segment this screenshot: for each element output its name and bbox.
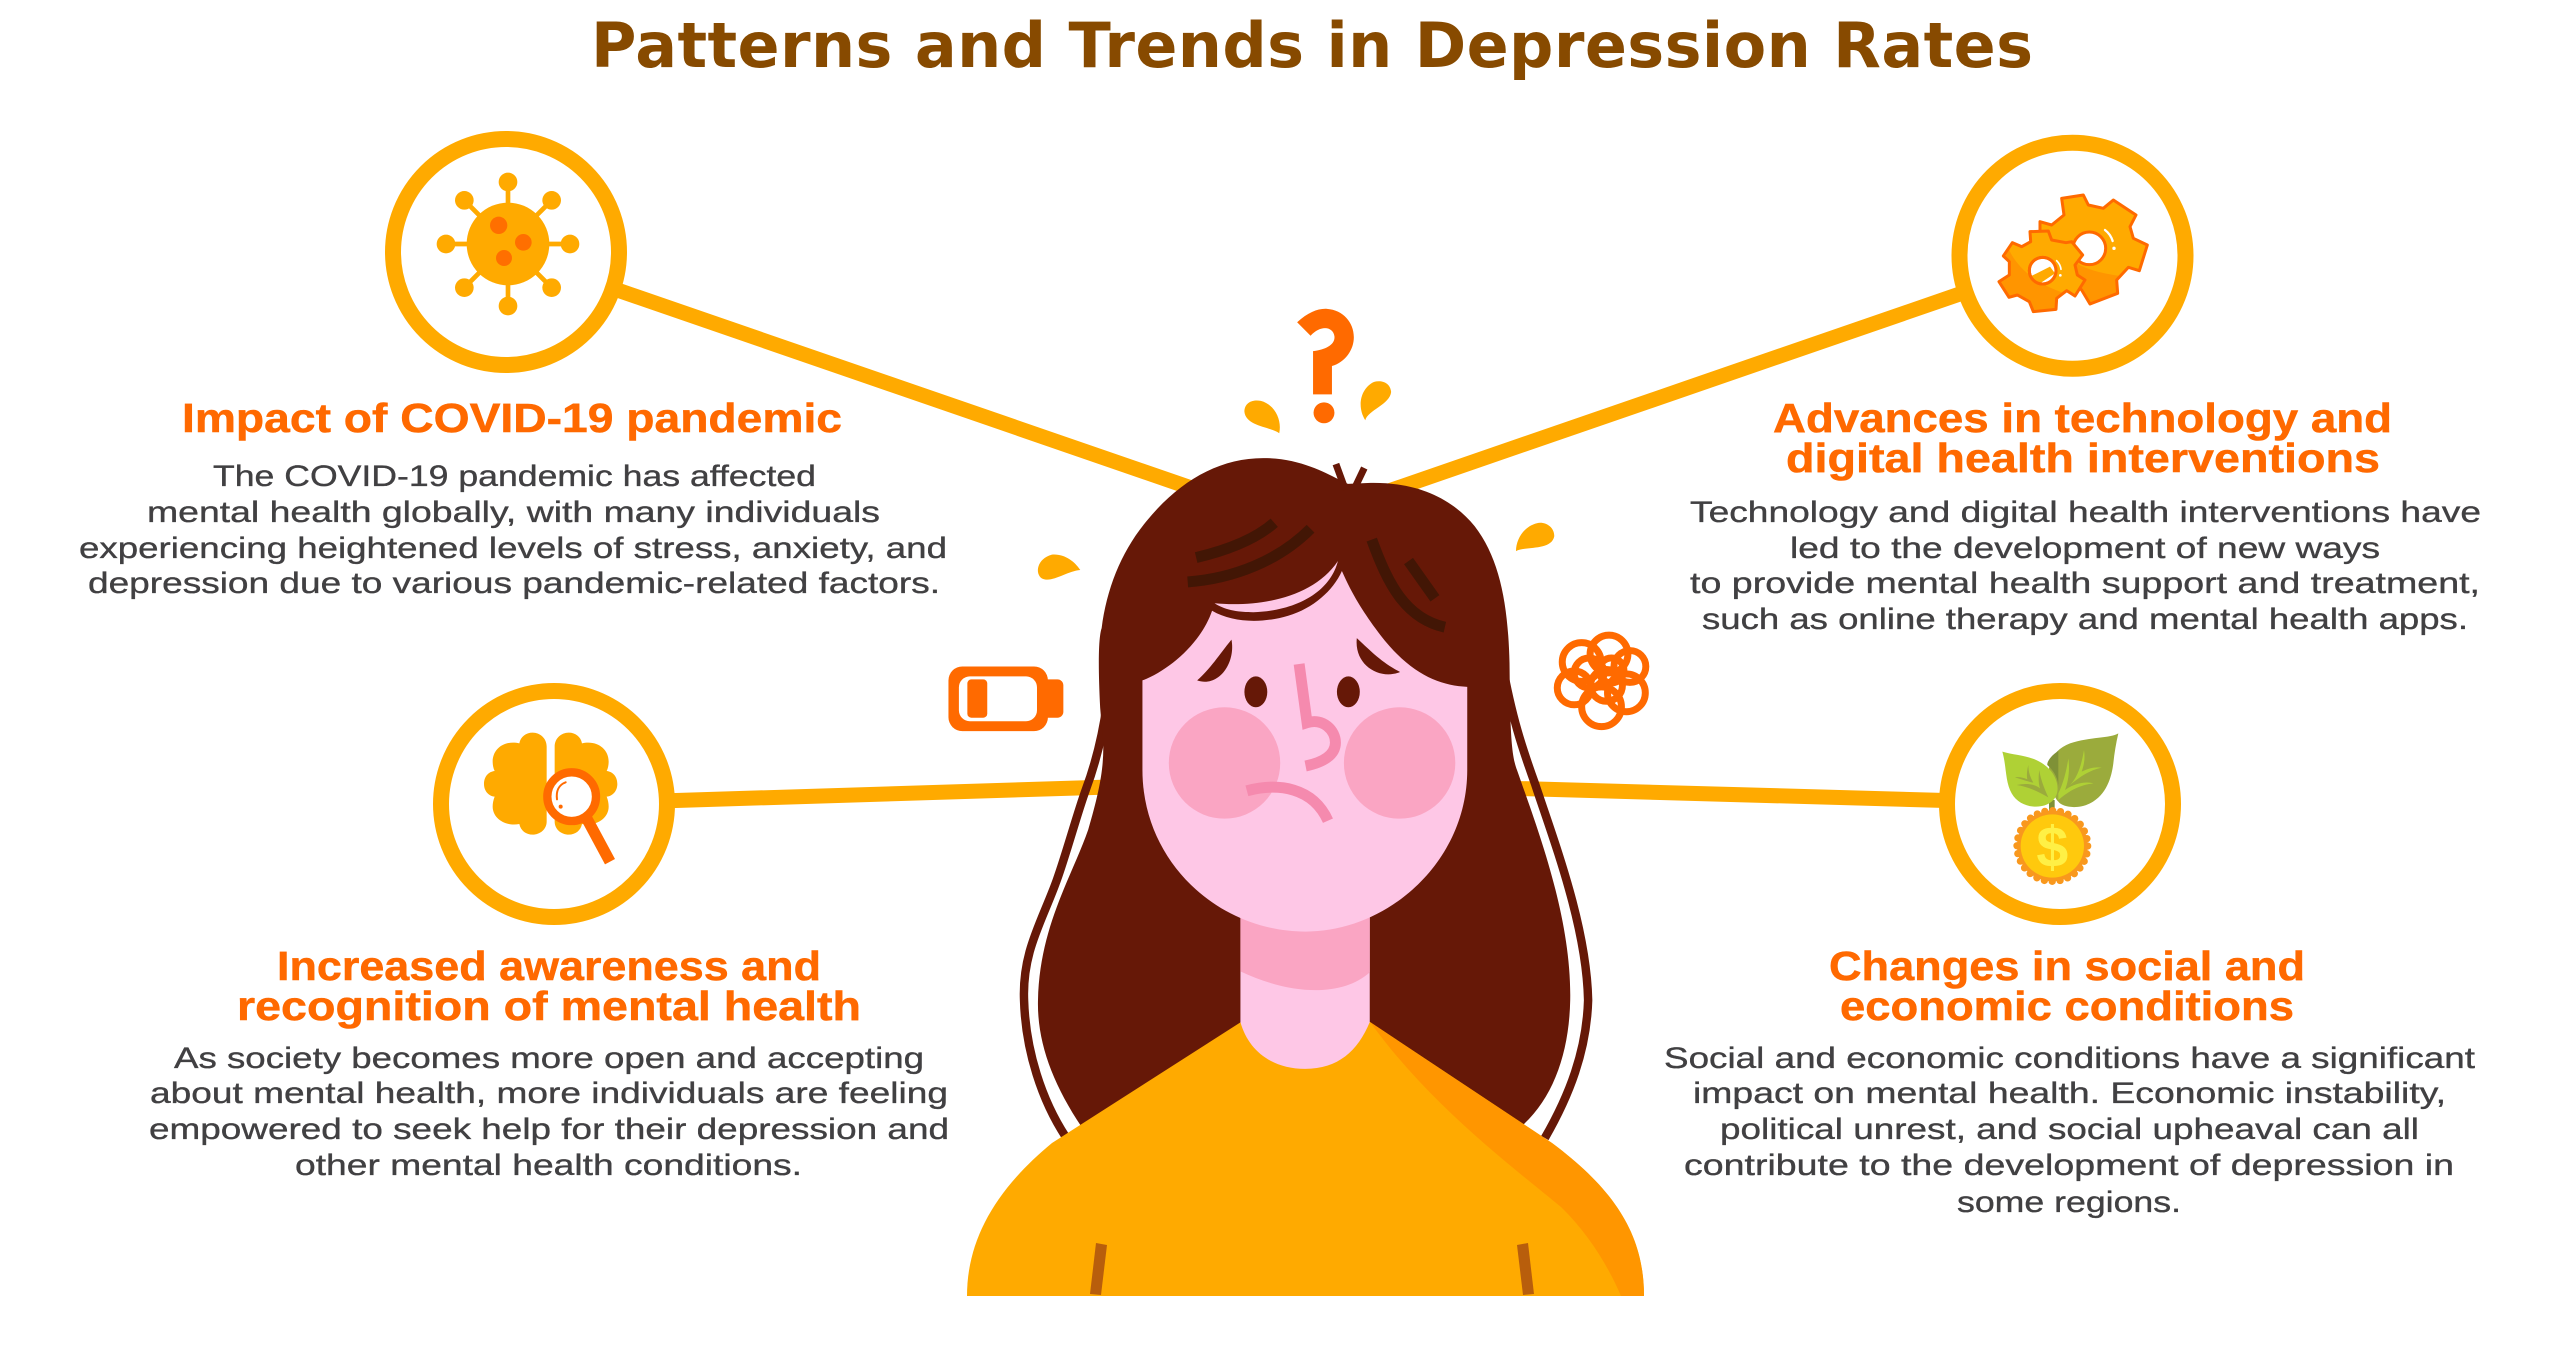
icon: plant and coin: $ [2036, 816, 2068, 880]
heading: Advances in technology and [1773, 395, 2392, 441]
ring [441, 691, 667, 917]
body: Technology and digital health interventions have [1690, 496, 2481, 529]
panel: covid icon [393, 139, 619, 365]
icon: brain with magnifier [484, 733, 617, 862]
hair [1038, 458, 1570, 1127]
body: to provide mental health support and treatment, [1690, 567, 2480, 600]
hair highlights [1188, 523, 1445, 627]
text: economic [1664, 943, 2476, 1219]
title: Patterns and Trends in Depression Rates [591, 9, 2033, 82]
figure: worried woman [948, 309, 1646, 1296]
panel: awareness icon [441, 691, 667, 917]
body: such as online therapy and mental health apps. [1702, 603, 2468, 636]
heading: recognition of mental health [237, 983, 861, 1029]
body [1690, 496, 2481, 636]
body [79, 460, 947, 600]
heading [1773, 395, 2392, 481]
shirt creases [1090, 1243, 1534, 1295]
body: As society becomes more open and accepting [174, 1042, 924, 1075]
body: The COVID-19 pandemic has affected [213, 460, 816, 493]
cheeks [1169, 707, 1455, 819]
shirt [967, 1022, 1644, 1296]
icon: gears [1993, 195, 2147, 320]
panel: economic icon [1947, 691, 2173, 917]
icon: tangled thoughts [1557, 635, 1646, 727]
icon: virus [437, 173, 579, 315]
body [149, 1042, 949, 1182]
ring [393, 139, 619, 365]
connector lines [600, 284, 2000, 802]
body: contribute to the development of depression in [1684, 1149, 2454, 1182]
body: other mental health conditions. [295, 1149, 802, 1182]
body: experiencing heightened levels of stress, anxiety, and [79, 532, 947, 565]
heading: Impact of COVID-19 pandemic [182, 395, 842, 441]
heading [1829, 943, 2305, 1029]
body: mental health globally, with many individuals [147, 496, 880, 529]
heading: Increased awareness and [277, 943, 821, 989]
body [1664, 1042, 2476, 1219]
body: Social and economic conditions have a significant [1664, 1042, 2476, 1075]
eyes [1244, 676, 1360, 707]
heading: economic conditions [1840, 983, 2294, 1029]
body: about mental health, more individuals are feeling [150, 1077, 948, 1110]
forehead sliver [1215, 561, 1338, 612]
eyebrows [1197, 638, 1400, 682]
text: technology [1690, 395, 2481, 636]
ring [1960, 143, 2186, 369]
icon: sweat drops [1038, 381, 1554, 580]
icon: low battery [948, 666, 1063, 731]
body: impact on mental health. Economic instability, [1693, 1077, 2446, 1110]
heading [237, 943, 861, 1029]
icon: question mark [1297, 309, 1354, 423]
text: awareness [149, 943, 949, 1182]
heading: Changes in social and [1829, 943, 2305, 989]
body: empowered to seek help for their depression and [149, 1113, 949, 1146]
text: covid [79, 395, 947, 600]
hair flyaways [1336, 464, 1364, 490]
hair strands [1024, 663, 1588, 1138]
nose and mouth [1247, 664, 1335, 821]
body: led to the development of new ways [1790, 532, 2380, 565]
face [1142, 571, 1467, 932]
panel: technology icon [1960, 143, 2186, 369]
body: depression due to various pandemic-related factors. [88, 567, 940, 600]
neck shadow [1240, 902, 1370, 990]
icon: plant and coin [2002, 733, 2118, 881]
ring [1947, 691, 2173, 917]
floating symbols [948, 309, 1646, 731]
head [1142, 464, 1467, 1069]
neck [1240, 902, 1370, 1069]
heading: digital health interventions [1786, 435, 2380, 481]
body: some regions. [1957, 1186, 2181, 1219]
shirt shadow [1370, 1022, 1644, 1296]
body: political unrest, and social upheaval can all [1720, 1113, 2419, 1146]
